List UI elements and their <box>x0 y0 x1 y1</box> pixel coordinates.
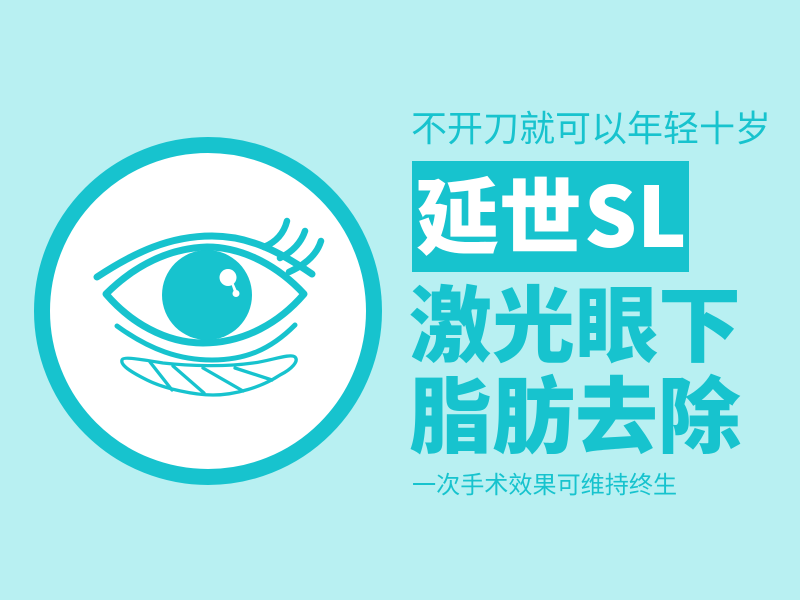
icon: under-eye fat pad <box>122 356 296 395</box>
brand label box <box>412 161 689 272</box>
icon: eyelashes <box>264 221 321 272</box>
brand name: SL <box>584 151 687 271</box>
brand name: 延世 <box>416 151 582 271</box>
icon: iris <box>162 250 252 340</box>
brand name <box>416 151 687 271</box>
icon: lower eyelid line <box>117 325 295 360</box>
icon: eye outline <box>106 247 304 343</box>
main heading line 1: 激光眼下 <box>409 259 741 379</box>
tagline: 不开刀就可以年轻十岁 <box>411 100 771 152</box>
icon: upper eyelid crease <box>97 236 312 277</box>
subtitle: 一次手术效果可维持终生 <box>412 465 677 500</box>
icon: eye highlight <box>220 269 240 297</box>
main heading line 2: 脂肪去除 <box>409 350 741 470</box>
white circle badge <box>42 145 374 477</box>
